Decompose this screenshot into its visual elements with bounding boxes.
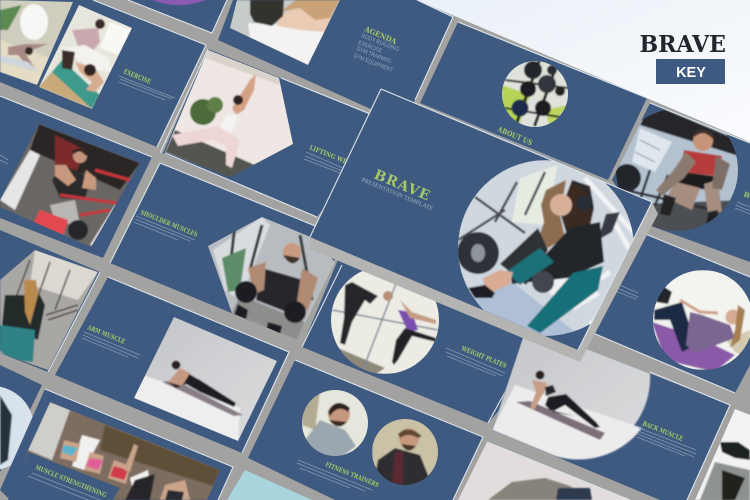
photo: plank (130, 315, 280, 445)
photo: man at red machine (0, 120, 145, 250)
heading: exercise: EXERCISE (122, 67, 152, 86)
text block: agenda list: GYM EQUIPMENT (352, 53, 394, 74)
text block: partial lines (735, 202, 750, 214)
photo: yoga lunge (165, 50, 293, 177)
badge: key: KEY (676, 65, 706, 81)
photo: barre stretch circle (330, 266, 440, 378)
slide: arm muscle (55, 277, 289, 453)
slide: back muscle (492, 325, 730, 500)
heading: weight plates: WEIGHT PLATES (460, 344, 508, 370)
text block: agenda list (352, 33, 400, 74)
logo: brave wordmark: BRAVE (640, 31, 726, 58)
photo: group dumbbell class (8, 400, 223, 500)
heading: brave slide title: BRAVE (371, 167, 432, 204)
photo: woman doing crunches (650, 270, 750, 372)
text block: sit-ups body (615, 283, 638, 299)
slide: purple top fragment (128, 0, 227, 33)
slide: blurred floor photo (458, 442, 630, 500)
photo: woman assisting stretch (39, 5, 132, 109)
slide: battle rope woman (0, 230, 100, 375)
heading: shoulder muscles: SHOULDER MUSCLES (139, 208, 199, 239)
slide: shoulder muscles (110, 163, 345, 345)
slide: agenda (218, 0, 454, 109)
photo: trainer in leather jacket (372, 419, 438, 485)
heading: back muscle: BACK MUSCLE (641, 419, 684, 443)
slide: about us (420, 22, 647, 180)
slide: deadlift (610, 100, 750, 262)
text block: weight body (446, 348, 505, 376)
photo: smiling trainer (302, 390, 368, 456)
photo: woman with headphones (455, 160, 640, 340)
photo: purple mat circle (152, 0, 206, 5)
heading: about us: ABOUT US (495, 124, 534, 147)
text block: exercise body (119, 76, 175, 100)
heading: fitness trainers: FITNESS TRAINERS (324, 460, 380, 489)
panel: main title slide (310, 89, 652, 350)
slide: sit-ups (593, 232, 750, 393)
photo: side stretch yoga (0, 0, 73, 85)
text block: presentation template: PRESENTATION TEMPLATE (360, 177, 434, 212)
slide: lifting weights (160, 48, 369, 218)
text block: lifting body (304, 152, 345, 173)
slide: left circle fragment (0, 365, 42, 475)
panel: main slide thickness (310, 202, 658, 362)
photo: bearded man squat (208, 217, 335, 340)
slide: teal photo fragment (227, 470, 312, 500)
photo: woman with ropes (0, 245, 100, 375)
text block: agenda list: GYM TRAINING (355, 46, 392, 65)
text block: agenda list: BODY BUILDING (360, 33, 400, 53)
text block: back body (637, 428, 696, 457)
photo: dumbbell and blonde woman (230, 0, 340, 65)
heading: lifting weights: LIFTING WE (308, 143, 348, 166)
text block: arm body (82, 332, 140, 358)
slide: exercise (0, 0, 206, 147)
text block: agenda list: EXERCISE (357, 40, 383, 55)
slide: bottom right photo (695, 409, 750, 500)
text block: partial text at left (0, 155, 8, 164)
text block: shoulder body (134, 216, 195, 241)
heading: agenda: AGENDA (362, 24, 398, 46)
background: white backdrop top right (417, 0, 750, 142)
slide: fitness trainers (248, 360, 483, 500)
photo: weight rack circle (500, 60, 570, 128)
slide: muscle strengthening (0, 389, 233, 500)
slide: weight plates (302, 250, 526, 424)
photo: gym circle (0, 386, 32, 470)
panel: blue title bar (8, 452, 120, 500)
heading: arm muscle: ARM MUSCLE (86, 323, 126, 346)
slide: red machine workout (0, 96, 152, 258)
text block: trainers body (297, 460, 372, 491)
photo: man on floor (488, 478, 592, 500)
photo: man lifting barbell (616, 110, 750, 231)
photo: mountain climber circle (492, 325, 650, 459)
text block: muscle body (28, 473, 100, 500)
badge: key (656, 59, 725, 84)
